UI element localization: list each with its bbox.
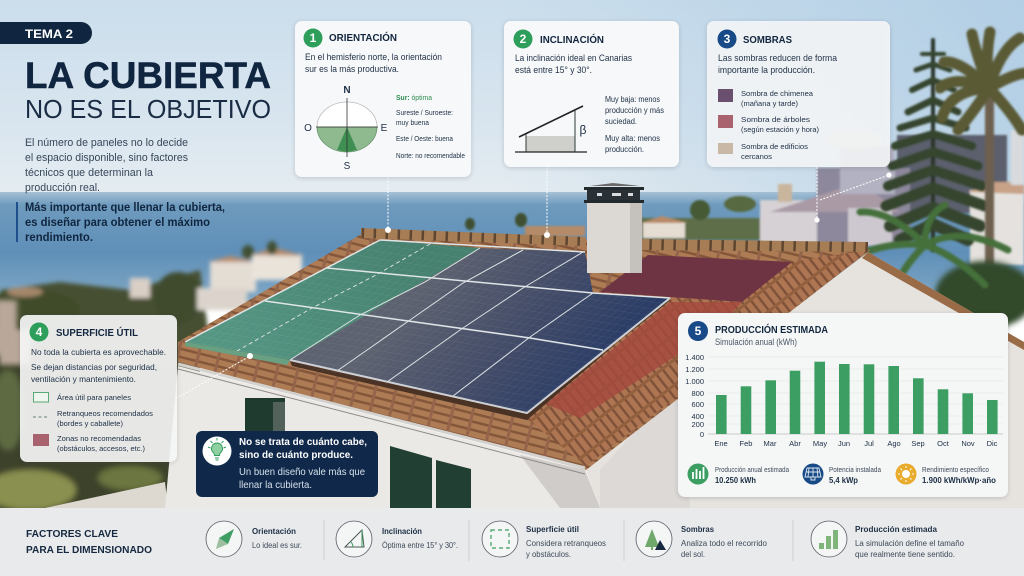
callout text <box>239 436 367 491</box>
factor: sombras: Analiza todo el recorrido <box>681 539 768 548</box>
factor: producción estimada: que realmente tiene sentido. <box>855 550 955 559</box>
bar heading <box>26 529 152 556</box>
compass diagram: N <box>343 85 351 96</box>
intro text: producción real. <box>25 182 100 194</box>
bar chart: Nov <box>961 439 975 448</box>
bar chart: 1.400 <box>685 353 704 362</box>
description: importante la producción. <box>718 65 815 76</box>
left bushes <box>0 300 180 515</box>
stat: rendimiento: 1.900 kWh/kWp·año <box>922 475 996 485</box>
key message: es diseñar para obtener el máximo <box>25 217 210 229</box>
panel 5: producción estimada <box>678 313 1008 497</box>
stat: producción anual: Producción anual estimada <box>715 467 789 474</box>
bar chart: Sep <box>911 439 925 448</box>
heading: SOMBRAS <box>743 34 792 46</box>
palm <box>940 32 1024 265</box>
factor: orientación: Lo ideal es sur. <box>252 541 302 550</box>
windows <box>245 398 285 432</box>
callout text: Un buen diseño vale más que <box>239 467 365 478</box>
callout <box>196 431 378 497</box>
description: ventilación y mantenimiento. <box>31 374 136 384</box>
shadow legend: (según estación y hora) <box>741 125 819 134</box>
badge 1 <box>304 28 322 48</box>
panel 2: inclinación <box>504 21 679 167</box>
key message: Más importante que llenar la cubierta, <box>25 202 225 214</box>
description: En el hemisferio norte, la orientación <box>305 52 442 63</box>
title: NO ES EL OBJETIVO <box>25 94 271 124</box>
bushes right <box>935 261 1024 514</box>
orientation legend: Norte: no recomendable <box>396 153 465 160</box>
wall left <box>165 366 600 508</box>
compass diagram: E <box>381 123 388 134</box>
area legend: Área útil para paneles <box>57 393 131 402</box>
description <box>31 347 166 384</box>
description: Las sombras reducen de forma <box>718 53 838 64</box>
orientation legend: Sur: óptima <box>396 95 432 102</box>
badge 1: 1 <box>310 31 317 45</box>
lower palm <box>842 205 1008 290</box>
intro text: técnicos que determinan la <box>25 167 154 179</box>
icon: light bulb <box>202 436 232 466</box>
factor: producción estimada: Producción estimada <box>855 525 938 534</box>
area legend <box>33 392 153 453</box>
bar heading: FACTORES CLAVE <box>26 529 118 540</box>
area legend: Zonas no recomendadas <box>57 434 141 443</box>
bar chart: Dic <box>987 439 998 448</box>
gutter <box>178 364 585 468</box>
shadow legend: (mañana y tarde) <box>741 99 798 108</box>
orientation legend: muy buena <box>396 120 429 127</box>
ridge <box>361 228 586 246</box>
bottom bar <box>0 508 1024 576</box>
bar chart: Jul <box>864 439 874 448</box>
compass diagram: O <box>304 123 312 134</box>
heading: ORIENTACIÓN <box>329 31 397 44</box>
stat: potencia <box>802 464 881 485</box>
factor: orientación <box>206 521 302 557</box>
compass diagram <box>304 85 388 172</box>
bar chart: 200 <box>691 420 704 429</box>
key message <box>16 202 225 244</box>
intro text <box>25 137 188 194</box>
bar chart: Oct <box>937 439 950 448</box>
factor: producción estimada <box>811 521 965 559</box>
bar chart: Jun <box>838 439 850 448</box>
tag: tema: TEMA 2 <box>25 27 73 41</box>
shadow legend: Sombra de chimenea <box>741 89 814 98</box>
title <box>25 54 271 124</box>
shadow legend: Sombra de edificios <box>741 142 808 151</box>
panel 4: superficie útil <box>20 315 177 462</box>
bar heading: PARA EL DIMENSIONADO <box>26 545 152 556</box>
tilt diagram: β <box>580 123 587 137</box>
factor: superficie útil: Superficie útil <box>526 525 579 534</box>
bar chart: Abr <box>789 439 801 448</box>
badge 5 <box>688 321 708 341</box>
subtitle: Simulación anual (kWh) <box>715 337 797 347</box>
bar chart: 0 <box>700 430 704 439</box>
tilt notes: producción y más <box>605 106 664 115</box>
heading: INCLINACIÓN <box>540 33 604 46</box>
badge 2 <box>514 30 532 48</box>
tag: tema <box>0 22 92 44</box>
description <box>718 53 838 76</box>
leader lines <box>177 167 892 398</box>
bar chart: 800 <box>691 389 704 398</box>
stat: potencia: Potencia instalada <box>829 467 881 474</box>
bar chart: Ago <box>887 439 901 448</box>
bar chart: 1.200 <box>685 365 704 374</box>
distant village left <box>0 241 305 370</box>
orientation legend <box>396 95 465 160</box>
factor: superficie útil: y obstáculos. <box>526 550 571 559</box>
chimney <box>584 183 644 273</box>
tilt notes <box>605 95 664 154</box>
factor: inclinación <box>336 521 458 557</box>
description: está entre 15° y 30°. <box>515 65 592 76</box>
area legend: (bordes y caballete) <box>57 419 123 428</box>
badge 4: 4 <box>36 325 43 339</box>
shadow legend: Sombra de árboles <box>741 115 810 124</box>
bar chart: Mar <box>764 439 777 448</box>
intro text: El número de paneles no lo decide <box>25 137 188 149</box>
badge 3: 3 <box>724 32 731 46</box>
bar chart <box>685 353 1003 448</box>
bar chart: Feb <box>740 439 752 448</box>
factor: inclinación: Óptima entre 15° y 30°. <box>382 541 458 550</box>
factor: orientación: Orientación <box>252 527 296 536</box>
description: sur es la más productiva. <box>305 64 399 75</box>
factor: sombras <box>636 521 768 559</box>
shaded red zones <box>600 255 792 302</box>
solar panels <box>290 299 672 420</box>
heading: SUPERFICIE ÚTIL <box>56 326 138 339</box>
factor: sombras: Sombras <box>681 525 715 534</box>
badge 3 <box>718 30 736 48</box>
bar chart: May <box>813 439 827 448</box>
bar chart: Ene <box>714 439 728 448</box>
factor: producción estimada: La simulación define el tamaño <box>855 539 965 548</box>
description <box>515 53 632 76</box>
badge 4 <box>30 322 48 342</box>
tilt notes: suciedad. <box>605 117 637 126</box>
factor: sombras: del sol. <box>681 550 705 559</box>
tilt diagram <box>515 106 587 152</box>
intro text: el espacio disponible, sino factores <box>25 152 188 164</box>
heading: PRODUCCIÓN ESTIMADA <box>715 323 828 336</box>
shadow legend: cercanos <box>741 152 772 161</box>
tilt notes: Muy baja: menos <box>605 95 660 104</box>
title: LA CUBIERTA <box>25 54 271 96</box>
factor: inclinación: Inclinación <box>382 527 422 536</box>
stat: rendimiento <box>896 464 996 485</box>
factor: superficie útil <box>482 521 606 559</box>
stat: producción anual: 10.250 kWh <box>715 475 756 485</box>
bar chart: 400 <box>691 412 704 421</box>
callout text: sino de cuánto produce. <box>239 449 353 461</box>
tilt notes: producción. <box>605 145 644 154</box>
wall right <box>585 252 1024 508</box>
description: La inclinación ideal en Canarias <box>515 53 632 64</box>
distant village right <box>465 130 1024 265</box>
description <box>305 52 442 75</box>
description: Se dejan distancias por seguridad, <box>31 362 157 372</box>
badge 2: 2 <box>520 32 527 46</box>
area legend: Retranqueos recomendados <box>57 409 153 418</box>
callout text: llenar la cubierta. <box>239 480 312 491</box>
stat: producción anual <box>688 464 789 485</box>
tilt notes: Muy alta: menos <box>605 134 660 143</box>
stat: rendimiento: Rendimiento específico <box>922 467 989 474</box>
orientation legend: Sureste / Suroeste: <box>396 110 453 117</box>
stat: potencia: 5,4 kWp <box>829 475 858 485</box>
roof <box>178 232 870 470</box>
area legend: (obstáculos, accesos, etc.) <box>57 444 145 453</box>
key message: rendimiento. <box>25 232 93 244</box>
description: No toda la cubierta es aprovechable. <box>31 347 166 357</box>
compass diagram: S <box>344 161 351 172</box>
factor: superficie útil: Considera retranqueos <box>526 539 606 548</box>
panel 1: orientación <box>295 21 471 177</box>
bar chart: 600 <box>691 400 704 409</box>
badge 5: 5 <box>695 324 702 338</box>
callout text: No se trata de cuánto cabe, <box>239 436 367 448</box>
shadow legend <box>718 89 819 161</box>
panel 3: sombras <box>707 21 890 167</box>
orientation legend: Este / Oeste: buena <box>396 136 453 143</box>
bar chart: 1.000 <box>685 377 704 386</box>
pine <box>886 40 985 250</box>
